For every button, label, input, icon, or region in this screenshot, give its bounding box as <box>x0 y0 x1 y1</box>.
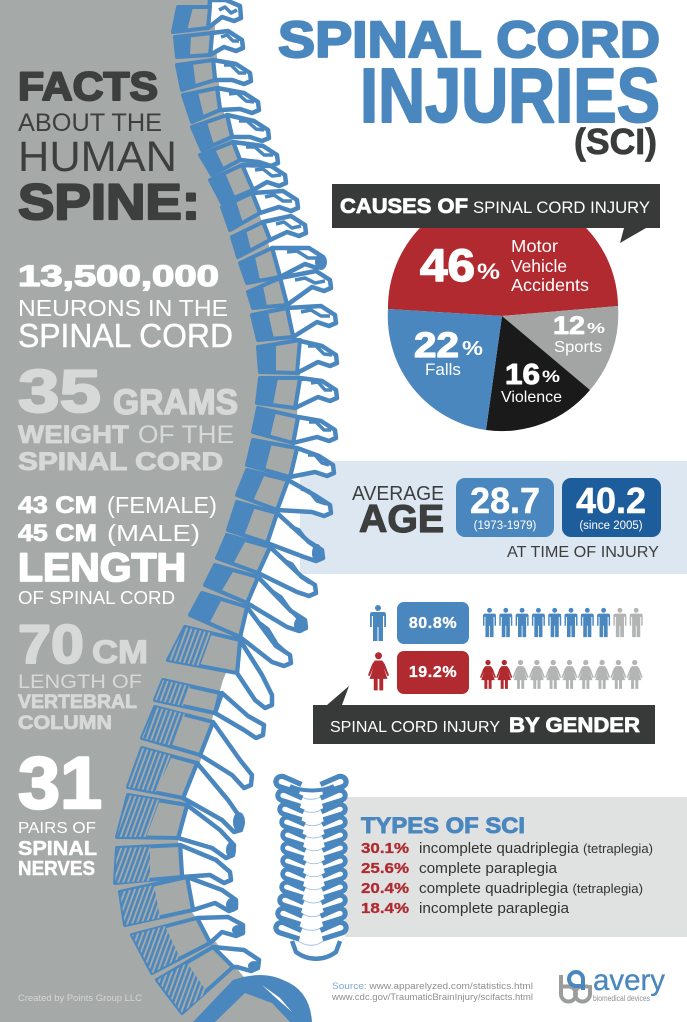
logo: avery biomedical devices: biomedical devices <box>593 994 650 1003</box>
fact: vertebral column: VERTEBRAL <box>18 692 137 713</box>
heading: facts about the human spine <box>18 65 200 230</box>
pie label: sports: 12 <box>553 312 585 340</box>
pie label: violence: % <box>542 367 560 386</box>
fact: vertebral column: 70 <box>18 613 84 675</box>
heading: facts about the human spine: ABOUT THE <box>18 109 162 137</box>
pie label: motor vehicle accidents <box>420 236 589 295</box>
fact: vertebral column <box>18 613 148 734</box>
pie label: violence: Violence <box>501 389 562 406</box>
vertebral processes <box>178 0 337 971</box>
list item: 25.6%: 25.6% <box>361 861 409 877</box>
sources: www.cdc.gov/TraumaticBrainInjury/scifacts.html <box>331 992 533 1003</box>
panel: average age band <box>300 461 687 574</box>
pie label: sports: Sports <box>554 339 602 356</box>
banner: causes of spinal cord injury <box>332 184 660 243</box>
box: 1973-1979 <box>456 478 554 537</box>
pie label: violence: 16 <box>505 359 540 391</box>
list item: 25.6%: complete paraplegia <box>419 860 558 877</box>
list item: 20.4%: complete quadriplegia (tetraplegia) <box>419 880 643 897</box>
box: since 2005: (since 2005) <box>579 520 643 532</box>
box: male percent <box>397 602 469 644</box>
panel: types of SCI background <box>345 797 687 937</box>
box: female percent <box>397 651 469 694</box>
sources: Source: www.apparelyzed.com/statistics.html <box>332 981 533 992</box>
caption: at time of injury: AT TIME OF INJURY <box>507 544 659 561</box>
fact: length: 45 CM <box>18 520 97 547</box>
fact: vertebral column: COLUMN <box>18 713 112 734</box>
list item: 30.1%: 30.1% <box>361 841 409 857</box>
fact: length: OF SPINAL CORD <box>18 587 175 608</box>
pie label: motor vehicle accidents: Accidents <box>511 275 589 295</box>
pie label: falls: % <box>462 338 483 360</box>
average age <box>352 478 661 561</box>
vertebral bodies <box>115 7 300 1013</box>
pictogram: men <box>483 608 643 637</box>
fact: length: (MALE) <box>107 520 200 546</box>
box: since 2005: 40.2 <box>576 480 646 521</box>
label: average age <box>352 483 444 541</box>
label: average age: AVERAGE <box>352 483 444 505</box>
list item: 18.4%: incomplete paraplegia <box>419 900 570 917</box>
fact: weight: 35 <box>18 358 101 425</box>
fact: vertebral column: LENGTH OF <box>18 672 142 693</box>
pie label: falls: Falls <box>425 360 461 379</box>
fact: weight <box>18 358 238 476</box>
box: since 2005 <box>562 478 661 537</box>
pie label: sports <box>553 312 605 356</box>
fact: length: 43 CM <box>18 492 97 519</box>
gender: female row <box>368 651 643 694</box>
pie chart: causes <box>388 192 618 431</box>
box: male percent: 80.8% <box>409 615 457 632</box>
logo: avery biomedical devices: avery <box>593 964 665 997</box>
title: (SCI) <box>574 121 657 162</box>
box: 1973-1979: 28.7 <box>470 480 540 521</box>
logo: avery biomedical devices <box>561 964 665 1003</box>
title <box>278 11 660 162</box>
pie label: motor vehicle accidents: 46 <box>420 240 475 291</box>
sources <box>331 981 533 1003</box>
fact: length: (FEMALE) <box>107 492 217 518</box>
fact: neurons: NEURONS IN THE <box>18 295 228 321</box>
icon: woman <box>368 652 389 690</box>
pie label: motor vehicle accidents: % <box>477 259 500 284</box>
fact: spinal nerves <box>18 743 102 880</box>
fact: spinal nerves: PAIRS OF <box>18 820 96 837</box>
pie label: falls: 22 <box>414 326 459 365</box>
list item: 30.1%: incomplete quadriplegia (tetraplegia) <box>419 840 653 857</box>
logo mark <box>561 972 590 1002</box>
panel: facts background <box>0 0 300 1022</box>
icon: spinal cord stack <box>276 776 346 959</box>
box: female percent: 19.2% <box>409 664 457 681</box>
fact: weight: SPINAL CORD <box>18 448 223 476</box>
list item: 20.4%: 20.4% <box>361 881 409 897</box>
process shading <box>219 7 332 652</box>
heading: facts about the human spine: HUMAN <box>18 133 177 181</box>
vertebra shading <box>115 7 278 1013</box>
pie label: violence <box>501 359 562 406</box>
fact: neurons <box>18 260 233 354</box>
pie label: motor vehicle accidents: Motor <box>511 236 558 256</box>
fact: length: LENGTH <box>18 546 186 590</box>
types of SCI: TYPES OF SCI <box>361 813 525 838</box>
fact: weight: GRAMS <box>113 383 238 422</box>
sacrum <box>193 975 312 1022</box>
fact: vertebral column: CM <box>92 634 148 670</box>
fact: neurons: 13,500,000 <box>18 260 219 293</box>
list item: 18.4%: 18.4% <box>361 901 409 917</box>
fact: spinal nerves: SPINAL <box>18 838 97 860</box>
fact: weight: WEIGHT <box>18 421 129 449</box>
fact: neurons: SPINAL CORD <box>18 317 233 354</box>
types of SCI <box>361 813 653 917</box>
banner: causes of spinal cord injury: SPINAL CORD INJURY <box>473 198 650 217</box>
pie label: sports: % <box>587 320 605 337</box>
fact: spinal nerves: NERVES <box>18 858 95 880</box>
list item: 25.6% <box>361 860 558 877</box>
pie label: motor vehicle accidents: Vehicle <box>511 256 567 276</box>
title: SPINAL CORD <box>278 11 660 68</box>
process tips <box>226 254 327 971</box>
fact: spinal nerves: 31 <box>18 743 102 824</box>
heading: facts about the human spine: FACTS <box>18 65 158 109</box>
pictogram: women <box>480 660 643 689</box>
fact: length <box>18 492 217 608</box>
icon: man <box>370 605 386 641</box>
banner: spinal cord injury by gender: SPINAL CORD INJURY <box>330 719 500 736</box>
banner: causes of spinal cord injury: CAUSES OF <box>340 195 468 218</box>
pie label: falls <box>414 326 483 379</box>
banner: spinal cord injury by gender: BY GENDER <box>509 714 640 737</box>
banner: spinal cord injury by gender <box>313 686 655 744</box>
gender: male row <box>370 602 643 644</box>
illustration: spine <box>115 0 337 1022</box>
fact: weight: OF THE <box>138 421 234 449</box>
box: 1973-1979: (1973-1979) <box>474 520 536 532</box>
heading: facts about the human spine: SPINE: <box>18 174 200 230</box>
credit: Created by Points Group LLC <box>18 993 142 1004</box>
label: average age: AGE <box>359 498 444 541</box>
